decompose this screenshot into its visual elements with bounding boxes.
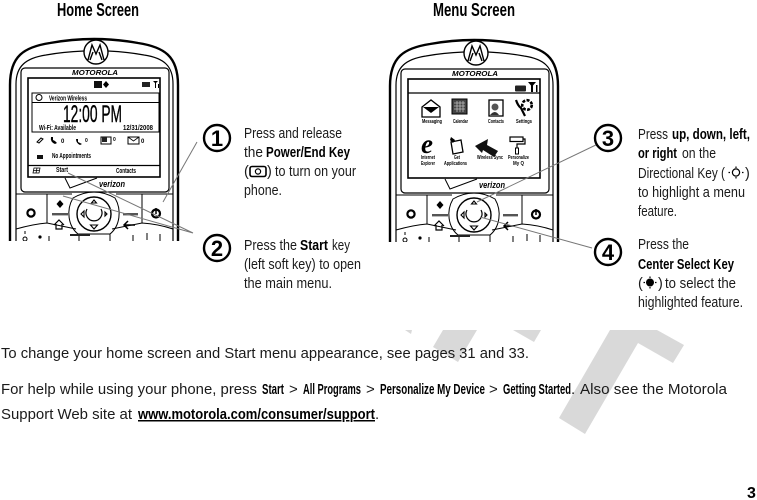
number badge 4: 4 [602, 240, 615, 265]
paragraph: help instructions: Support Web site at [1, 406, 133, 423]
callout 2 text: Press the [244, 238, 297, 254]
callout 3 text: Directional Key ( [638, 166, 725, 182]
notification icons: 0 [61, 139, 65, 145]
callout 2 text: Start [300, 238, 328, 254]
paragraph: help instructions: Start [262, 381, 284, 398]
callout 1 [204, 125, 356, 199]
callout 2 text: (left soft key) to open [244, 257, 361, 273]
menu icon: contacts: Contacts [488, 119, 504, 125]
home screen display [28, 81, 160, 175]
leader line: callout 4 [480, 217, 592, 248]
Motorola wordmark: MOTOROLA [72, 70, 118, 77]
number badge 2 [204, 235, 230, 261]
callout 3 [595, 125, 750, 220]
menu icon: calendar: Calendar [453, 119, 469, 125]
notification icons: 0 [141, 139, 145, 145]
paragraph: help instructions: Also see the Motorola [580, 381, 728, 398]
paragraph: help instructions: > [366, 381, 375, 398]
number badge 1 [204, 125, 230, 151]
number badge 4 [595, 239, 621, 265]
menu icon: internet explorer: e [421, 129, 433, 159]
notification icons: 0 [85, 138, 88, 144]
callout 1 text: ) [267, 164, 272, 180]
callout 3 text: on the [682, 146, 716, 162]
leader line: callout 1 [163, 142, 197, 202]
callout 1 text: phone. [244, 183, 282, 199]
number badge 1: 1 [211, 126, 223, 151]
callout 2 [204, 235, 361, 292]
callout 4 [595, 237, 743, 311]
menu icon: internet explorer: Internet [421, 155, 435, 161]
menu icon: get applications: Get [454, 155, 460, 161]
menu icon: settings: Settings [516, 119, 532, 125]
notification icons [37, 137, 145, 145]
paragraph: home screen note: To change your home screen and Start menu appearance, see pages 31 and 33. [1, 345, 529, 362]
home screen display: 12/31/2008 [123, 125, 153, 132]
number badge 3 [595, 125, 621, 151]
notification icons: 0 [113, 137, 116, 143]
phone: menu screen [390, 40, 558, 246]
home screen display: Contacts [116, 168, 136, 175]
home screen display: No Appointments [52, 153, 91, 160]
callout 3 text [638, 127, 750, 220]
menu icon: internet explorer [421, 129, 436, 167]
callout 2 text: the main menu. [244, 276, 332, 292]
callout 2 text: key [332, 238, 351, 254]
callout 2 text [244, 238, 361, 292]
callout 4 text: ) [658, 276, 663, 292]
number badge 3: 3 [602, 126, 614, 151]
callout 1 text: Power/End Key [266, 145, 350, 161]
menu icon: personalize: Personalize [508, 155, 529, 161]
callout 3 text: feature. [638, 204, 677, 220]
callout 3 text: or right [638, 146, 677, 162]
menu icon: get applications [444, 137, 467, 167]
menu display [408, 82, 540, 167]
callout 1 text: the [244, 145, 263, 161]
home screen display: Wi-Fi: Available [39, 125, 76, 132]
Motorola wordmark: MOTOROLA [452, 71, 498, 78]
callout 4 text: to select the [665, 276, 736, 292]
paragraph: help instructions: > [289, 381, 298, 398]
paragraph: help instructions [1, 381, 728, 423]
paragraph: help instructions: . [571, 381, 575, 398]
draft watermark [405, 330, 684, 434]
paragraph: help instructions: All Programs [303, 381, 361, 398]
phone: home screen [10, 39, 178, 245]
home screen display: Verizon Wireless [49, 96, 87, 102]
leader lines: callout 2 [63, 173, 193, 233]
Verizon wordmark: verizon [99, 179, 125, 189]
menu icon: personalize [508, 137, 529, 167]
menu icon: internet explorer: Explorer [421, 161, 436, 167]
heading: Menu Screen: Menu Screen [433, 0, 515, 20]
paragraph: help instructions: Getting Started [503, 381, 571, 398]
menu icon: messaging: Messaging [422, 119, 442, 125]
callout 4 text: ( [638, 276, 643, 292]
menu icon: wireless sync: Wireless Sync [477, 155, 503, 161]
menu icon: personalize: My Q [513, 161, 525, 167]
callout 4 text: Press the [638, 237, 689, 253]
number badge 2: 2 [211, 236, 223, 261]
callout 4 text [638, 237, 743, 311]
Verizon wordmark: verizon [479, 180, 505, 190]
callout 1 text: ( [244, 164, 249, 180]
callout 1 text: Press and release [244, 126, 342, 142]
callout 1 text [244, 126, 356, 199]
callout 3 text: Press [638, 127, 668, 143]
paragraph: help instructions: www.motorola.com/consumer/support [137, 406, 375, 423]
paragraph: help instructions: Personalize My Device [380, 381, 485, 398]
callout 3 text: to highlight a menu [638, 185, 745, 201]
heading: Home Screen: Home Screen [57, 0, 139, 20]
leader line: callout 3 [477, 143, 600, 202]
callout 3 text: ) [745, 166, 750, 182]
soft key labels: Start [56, 167, 68, 174]
menu icon: get applications: Applications [444, 161, 467, 167]
paragraph: help instructions: For help while using your phone, press [1, 381, 257, 398]
paragraph: help instructions: > [489, 381, 498, 398]
clock time: 12:00 PM [63, 101, 122, 128]
paragraph: help instructions: . [375, 406, 379, 423]
callout 1 text: to turn on your [275, 164, 356, 180]
